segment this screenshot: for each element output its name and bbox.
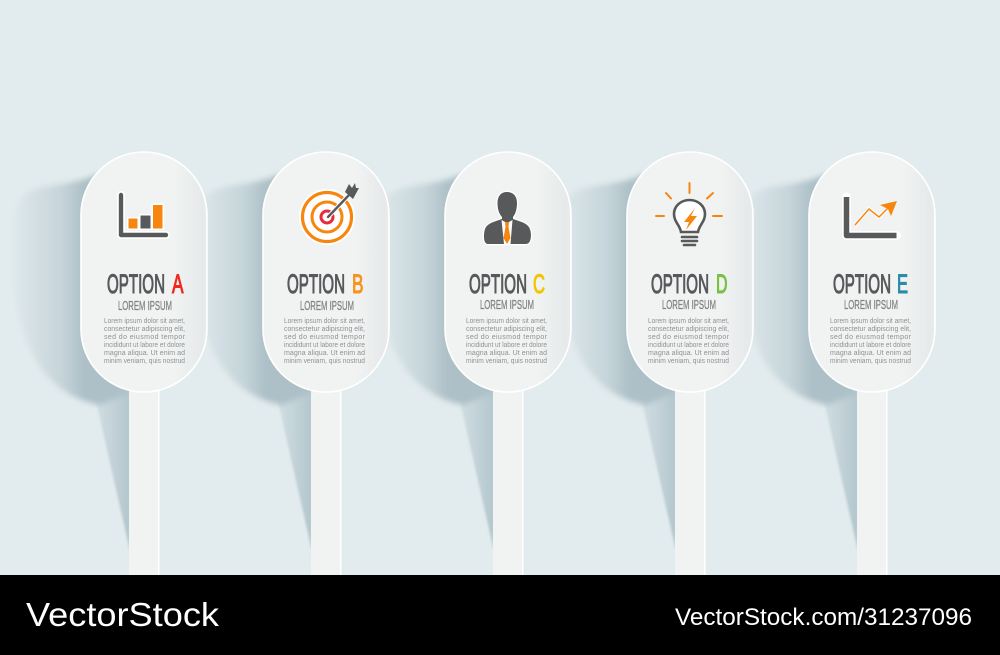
panel: option C: [445, 152, 571, 575]
card shadow E: [739, 175, 858, 551]
body text A: consectetur adipiscing elit,: [104, 326, 185, 333]
heading: option C: C: [533, 269, 545, 299]
icon: target with arrow: [299, 183, 359, 245]
stem A: [129, 388, 160, 575]
body text A: magna aliqua. Ut enim ad: [104, 350, 185, 357]
heading: option B: OPTION: [287, 269, 345, 299]
body text C: sed do eiusmod tempor: [466, 334, 548, 341]
stem D: [675, 388, 706, 575]
body text B: sed do eiusmod tempor: [284, 334, 366, 341]
heading: option E: E: [897, 269, 908, 299]
body text B: incididunt ut labore et dolore: [284, 342, 365, 349]
image id: VectorStock.com/31237096: [675, 604, 972, 631]
body text A: incididunt ut labore et dolore: [104, 342, 185, 349]
panel: option D: [627, 152, 753, 575]
card C: [445, 152, 571, 392]
panel: option A: [81, 152, 207, 575]
heading: option A: A: [172, 269, 184, 299]
heading: option D: D: [716, 269, 728, 299]
body text D: [648, 318, 730, 365]
stem C: [493, 388, 524, 575]
subheading C: LOREM IPSUM: [480, 297, 534, 312]
panel: option E: [809, 152, 935, 575]
body text C: incididunt ut labore et dolore: [466, 342, 547, 349]
body text C: magna aliqua. Ut enim ad: [466, 350, 547, 357]
heading: option D: OPTION: [651, 269, 709, 299]
body text D: Lorem ipsum dolor sit amet,: [648, 318, 729, 325]
body text B: consectetur adipiscing elit,: [284, 326, 365, 333]
body text B: minim veniam, quis nostrud: [284, 358, 365, 365]
stem B: [311, 388, 342, 575]
panel: option B: [263, 152, 389, 575]
card E: [809, 152, 935, 392]
body text E: [830, 318, 912, 365]
icon: businessman: [484, 192, 531, 244]
body text C: [466, 318, 548, 365]
body text D: minim veniam, quis nostrud: [648, 358, 729, 365]
body text C: minim veniam, quis nostrud: [466, 358, 547, 365]
body text B: [284, 318, 366, 365]
subheading D: LOREM IPSUM: [662, 297, 716, 312]
card shadow B: [193, 175, 312, 551]
card shadow C: [375, 175, 494, 551]
body text E: incididunt ut labore et dolore: [830, 342, 911, 349]
body text D: magna aliqua. Ut enim ad: [648, 350, 729, 357]
card shadow A: [11, 175, 130, 551]
heading: option E: OPTION: [833, 269, 891, 299]
subheading E: LOREM IPSUM: [844, 297, 898, 312]
body text D: sed do eiusmod tempor: [648, 334, 730, 341]
body text E: minim veniam, quis nostrud: [830, 358, 911, 365]
body text A: Lorem ipsum dolor sit amet,: [104, 318, 185, 325]
icon: bar chart: [121, 195, 166, 235]
stem E: [857, 388, 888, 575]
body text D: incididunt ut labore et dolore: [648, 342, 729, 349]
icon: rising line chart: [846, 197, 897, 236]
body text E: Lorem ipsum dolor sit amet,: [830, 318, 911, 325]
card B: [263, 152, 389, 392]
body text B: Lorem ipsum dolor sit amet,: [284, 318, 365, 325]
body text B: magna aliqua. Ut enim ad: [284, 350, 365, 357]
body text C: Lorem ipsum dolor sit amet,: [466, 318, 547, 325]
card A: [81, 152, 207, 392]
footer bar: [0, 575, 1000, 655]
body text D: consectetur adipiscing elit,: [648, 326, 729, 333]
body text E: sed do eiusmod tempor: [830, 334, 912, 341]
subheading B: LOREM IPSUM: [300, 298, 354, 313]
icon: light bulb: [656, 183, 722, 245]
card D: [627, 152, 753, 392]
heading: option A: OPTION: [107, 269, 165, 299]
heading: option B: B: [352, 269, 364, 299]
body text A: minim veniam, quis nostrud: [104, 358, 185, 365]
body text E: consectetur adipiscing elit,: [830, 326, 911, 333]
body text E: magna aliqua. Ut enim ad: [830, 350, 911, 357]
subheading A: LOREM IPSUM: [118, 298, 172, 313]
heading: option C: OPTION: [469, 269, 527, 299]
card shadow D: [557, 175, 676, 551]
body text A: sed do eiusmod tempor: [104, 334, 186, 341]
watermark logo: VectorStock: [26, 597, 219, 634]
body text C: consectetur adipiscing elit,: [466, 326, 547, 333]
body text A: [104, 318, 186, 365]
